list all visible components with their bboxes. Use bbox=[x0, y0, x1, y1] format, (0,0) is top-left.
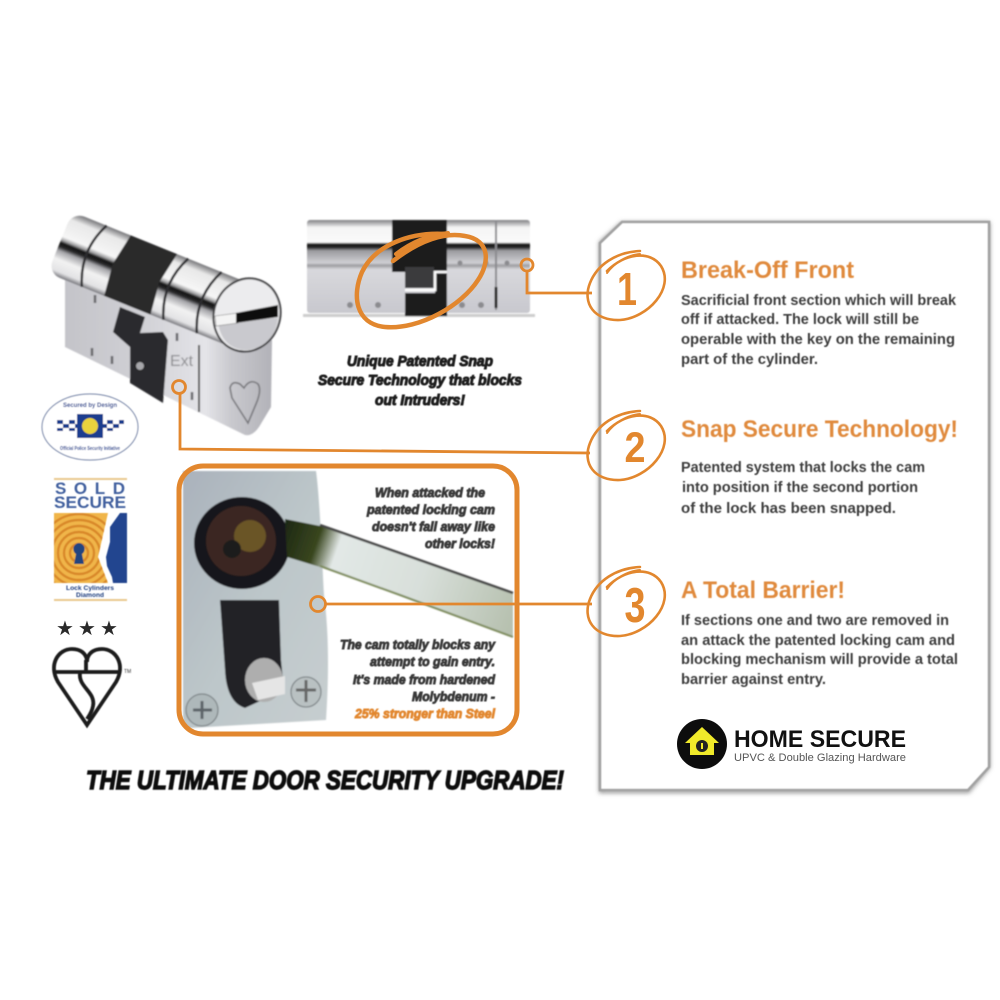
body text 3: If sections one and two are removed in bbox=[681, 612, 949, 629]
callout: molybdenum cam bbox=[340, 637, 496, 721]
badge: sold secure: SECURE bbox=[54, 493, 126, 512]
caption: snap secure technology: Secure Technology that blocks bbox=[318, 373, 522, 389]
number badge 3: 3 bbox=[624, 579, 646, 633]
panel: features card bbox=[588, 222, 989, 791]
number badge 3 bbox=[588, 567, 665, 636]
cylinder brass bbox=[234, 520, 266, 552]
body text 1: off if attacked. The lock will still be bbox=[681, 311, 919, 328]
step 1: break-off front bbox=[588, 251, 957, 368]
number badge 1 bbox=[588, 251, 665, 320]
step 2: snap secure technology bbox=[588, 411, 958, 517]
body text 2: into position if the second portion bbox=[682, 479, 918, 496]
orange keyhole block bbox=[54, 513, 108, 583]
callout: cam does not fall away: doesn't fall away like bbox=[372, 519, 495, 534]
body text 1: operable with the key on the remaining bbox=[681, 331, 955, 348]
badge: sold secure: Lock Cylinders bbox=[66, 586, 115, 592]
kitemark logo bbox=[54, 649, 131, 725]
kitemark engraving bbox=[230, 382, 260, 423]
caption: snap secure technology: Unique Patented Snap bbox=[347, 354, 493, 370]
card shadow bbox=[601, 224, 988, 791]
shadow under lock bbox=[303, 314, 535, 317]
card surface bbox=[600, 222, 989, 790]
kitemark logo: TM bbox=[124, 669, 131, 675]
badge: sold secure: Diamond bbox=[76, 593, 104, 599]
three stars: ★ bbox=[100, 618, 118, 640]
cam keyhole bbox=[136, 362, 144, 370]
connector 1: top lock to step 1 bbox=[521, 259, 592, 293]
three stars: ★ bbox=[56, 618, 74, 640]
screwdriver blade bbox=[285, 519, 513, 637]
callout: cam does not fall away bbox=[366, 485, 496, 551]
callout: molybdenum cam: It's made from hardened bbox=[353, 672, 496, 687]
lock front face bbox=[203, 269, 291, 361]
heading 1: Break-Off Front bbox=[681, 257, 854, 284]
blue head silhouette bbox=[106, 513, 127, 583]
police checker bands bbox=[57, 420, 124, 431]
heading 3: A Total Barrier! bbox=[681, 577, 845, 604]
badge: secured by design bbox=[42, 394, 138, 460]
caption: snap secure technology bbox=[318, 354, 522, 409]
blocking cam arm bbox=[220, 600, 284, 708]
callout: molybdenum cam: 25% stronger than Steel bbox=[354, 706, 495, 721]
locking cam bbox=[113, 307, 168, 403]
body text 3: blocking mechanism will provide a total bbox=[681, 651, 958, 668]
bottom headline: THE ULTIMATE DOOR SECURITY UPGRADE! bbox=[86, 765, 564, 795]
heading 2: Snap Secure Technology! bbox=[681, 416, 958, 443]
callout: molybdenum cam: Molybdenum - bbox=[412, 689, 495, 704]
number badge 2: 2 bbox=[624, 424, 646, 472]
three stars: ★ bbox=[78, 618, 96, 640]
black cam section bbox=[392, 220, 447, 316]
logo icon: house with padlock bbox=[677, 719, 727, 769]
screw heads bbox=[347, 260, 510, 308]
body text 1 bbox=[681, 292, 957, 368]
photo panel: locking cam bbox=[179, 466, 517, 734]
top view lock photo bbox=[303, 220, 535, 317]
number badge 1: 1 bbox=[617, 263, 637, 315]
cam ring bbox=[194, 497, 290, 589]
lock pins bbox=[495, 220, 497, 310]
number badge 2 bbox=[588, 411, 665, 480]
engraved Ext text: Ext bbox=[170, 353, 194, 370]
callout: cam does not fall away: other locks! bbox=[425, 536, 496, 551]
body text 1: part of the cylinder. bbox=[681, 351, 818, 368]
body text 1: Sacrificial front section which will break bbox=[681, 292, 957, 309]
connector 2: main lock to step 2 bbox=[172, 380, 590, 453]
home secure logo bbox=[677, 719, 906, 769]
barrel grooves bbox=[74, 223, 222, 333]
three stars bbox=[56, 618, 118, 640]
black centre band bbox=[100, 233, 177, 315]
screwdriver and cam photo bbox=[180, 468, 513, 732]
connector 3: photo to step 3 bbox=[310, 596, 592, 612]
body text 3: barrier against entry. bbox=[681, 671, 826, 688]
orange hand-drawn ellipse on top lock bbox=[357, 233, 486, 327]
body text 3 bbox=[681, 612, 958, 688]
key slot bbox=[215, 313, 238, 326]
logo wordmark: HOME SECURE bbox=[734, 726, 906, 753]
cam white gap bbox=[405, 272, 447, 290]
body text 2: of the lock has been snapped. bbox=[681, 500, 896, 517]
caption: snap secure technology: out Intruders! bbox=[375, 393, 465, 409]
body text 3: an attack the patented locking cam and bbox=[681, 632, 955, 649]
callout: cam does not fall away: patented locking cam bbox=[366, 502, 495, 517]
badge: secured by design: Secured by Design bbox=[63, 402, 117, 409]
callout: cam does not fall away: When attacked the bbox=[375, 485, 485, 500]
lock side body bbox=[307, 220, 530, 313]
keyhole bbox=[73, 543, 85, 564]
cylinder barrel bbox=[48, 212, 259, 348]
sold secure wordmark: SOLD bbox=[55, 479, 125, 498]
plate screws bbox=[291, 677, 321, 707]
orange rounded frame bbox=[179, 466, 517, 734]
cam screw bbox=[245, 658, 283, 702]
body text 2 bbox=[681, 459, 925, 517]
snap line on body bbox=[198, 345, 200, 412]
police crest bbox=[77, 414, 103, 438]
logo tagline: UPVC & Double Glazing Hardware bbox=[734, 752, 906, 764]
lock plate bbox=[180, 468, 330, 732]
step 3: a total barrier bbox=[588, 567, 958, 688]
badge: secured by design: Official Police Security Initiative bbox=[60, 446, 120, 452]
main cylinder lock photo bbox=[48, 212, 291, 435]
callout: molybdenum cam: attempt to gain entry. bbox=[370, 654, 495, 669]
badge: sold secure bbox=[53, 477, 128, 602]
screw marks bbox=[92, 295, 192, 400]
callout: molybdenum cam: The cam totally blocks any bbox=[340, 637, 496, 652]
body text 2: Patented system that locks the cam bbox=[681, 459, 925, 476]
lock body bbox=[65, 270, 272, 435]
